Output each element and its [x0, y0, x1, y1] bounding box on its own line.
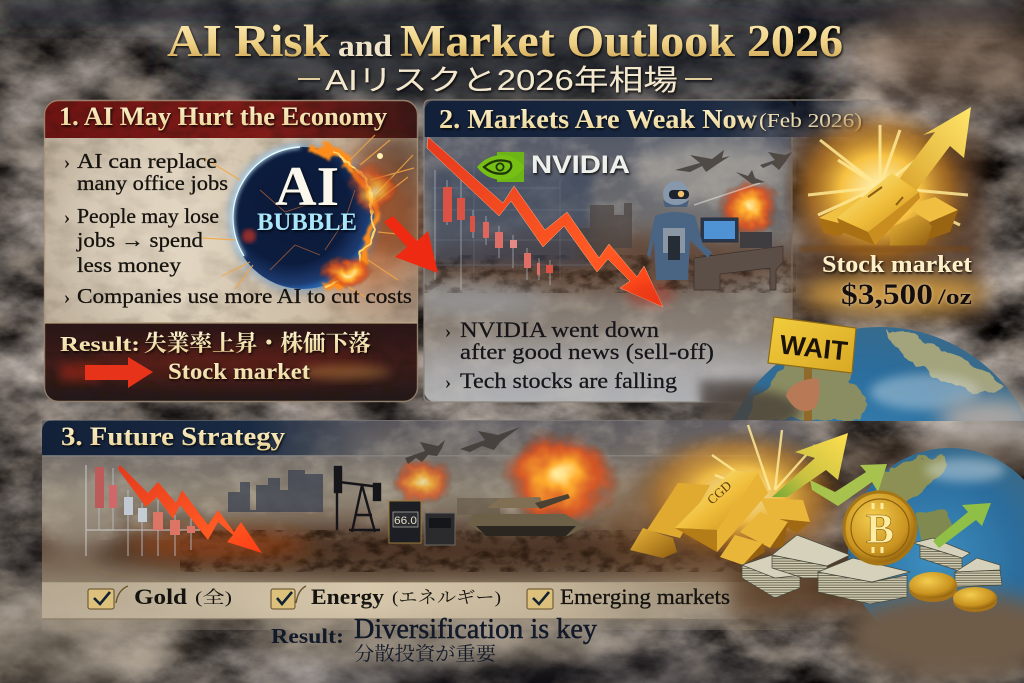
fighter jets	[675, 150, 792, 184]
red glow at arrow tip	[626, 283, 674, 307]
panel 1 result strip	[44, 322, 418, 403]
strategy check row band	[42, 582, 762, 620]
explosion	[717, 181, 781, 235]
panel 1 result text	[60, 331, 371, 384]
gold panel	[782, 102, 987, 317]
strategy result: Result:	[271, 624, 344, 648]
fuel gauges: 66.0	[394, 515, 417, 527]
panel 2 bullet list: ›	[445, 321, 451, 341]
city ruin silhouette	[575, 203, 632, 260]
panel 2 bullet list: ›	[445, 372, 451, 392]
gold label: Stock market	[822, 252, 972, 278]
panel 2 header band	[424, 100, 796, 137]
panel 1 bullet list: AI can replace	[77, 149, 217, 173]
panel 1 body	[44, 137, 420, 323]
main title: and	[338, 28, 392, 63]
gold price: $3,500	[841, 278, 933, 311]
hand	[786, 378, 819, 411]
check item: gold: Gold	[134, 584, 187, 609]
panel 2 heading: (Feb 2026)	[759, 110, 862, 132]
tank	[457, 494, 585, 536]
panel 1 bullet list: many office jobs	[77, 171, 228, 195]
globe upper	[700, 327, 1024, 421]
arrow: big red from bubble to panel 2	[384, 216, 438, 273]
globe lower	[845, 448, 1024, 680]
arrow: gold up	[897, 107, 971, 195]
panel 3: future strategy	[40, 420, 1024, 665]
robot body	[647, 212, 712, 280]
cash stacks	[742, 535, 1002, 604]
fuel gauges	[389, 501, 455, 545]
robot at desk	[647, 181, 783, 290]
panel 1 heading: 1. AI May Hurt the Economy	[59, 102, 387, 131]
logo: NVIDIA	[477, 151, 630, 182]
subtitle: AIリスクと2026年相場	[325, 64, 678, 97]
desk	[694, 246, 783, 290]
BUBBLE text: BUBBLE	[257, 209, 357, 236]
check item: energy: (エネルギー)	[392, 588, 501, 607]
panel 2 outline	[424, 100, 870, 402]
monitor	[701, 218, 738, 242]
panel 3 heading: 3. Future Strategy	[61, 422, 285, 451]
gold price	[841, 278, 972, 311]
bitcoin coin	[844, 492, 916, 564]
gold bars	[800, 173, 970, 252]
panel 1 bullet list	[64, 149, 412, 308]
panel 1 bullet list: Companies use more AI to cut costs	[77, 284, 412, 308]
arrow: green right	[933, 503, 991, 548]
candlestick chart small	[86, 465, 200, 556]
arrow: result red	[60, 357, 153, 388]
header extension	[796, 100, 886, 137]
check item: gold	[88, 584, 232, 609]
logo: NVIDIA: NVIDIA	[531, 151, 630, 179]
strategy result: 分散投資が重要	[354, 643, 496, 665]
panel 1 result text: Result:	[60, 332, 140, 356]
panel 1 result text: 失業率上昇・株価下落	[144, 331, 371, 356]
sign: WAIT: WAIT	[778, 330, 850, 367]
main title: Market Outlook 2026	[400, 16, 843, 66]
city skyline	[228, 470, 323, 512]
panel 1 bullet list: ›	[64, 287, 70, 307]
panel 1 result text: Stock market	[168, 359, 310, 384]
gold price: /oz	[937, 284, 972, 309]
sign: WAIT	[768, 317, 856, 421]
panel 2 heading: 2. Markets Are Weak Now	[439, 104, 758, 134]
check item: energy	[271, 584, 501, 609]
gold coins	[909, 572, 997, 612]
fighter jets small	[405, 427, 520, 464]
check item: energy: Energy	[311, 584, 384, 609]
main title	[167, 16, 843, 66]
panel 2 bullet list: NVIDIA went down	[460, 317, 659, 342]
panel 2 bullet list: after good news (sell-off)	[460, 339, 714, 364]
strategy result: Diversification is key	[354, 613, 597, 645]
panel 2 bullet list: Tech stocks are falling	[460, 368, 677, 393]
panel 2 bullet list	[445, 317, 714, 393]
bitcoin coin: B	[866, 507, 894, 553]
arrow: falling red small	[118, 465, 262, 553]
panel 1 bullet list: ›	[64, 152, 70, 172]
panel 3 header band	[42, 420, 762, 456]
arrow: falling red zigzag	[427, 137, 663, 307]
panel 1: AI may hurt the economy	[44, 100, 420, 403]
strategy result	[240, 613, 620, 665]
panel 1 header band	[44, 100, 418, 138]
candlestick chart	[432, 160, 600, 290]
gold pile and arrows	[630, 425, 1002, 612]
panel 1 bullet list: People may lose	[77, 204, 219, 228]
panel 1 bullet list: jobs → spend	[76, 228, 204, 252]
check item: gold: (全)	[195, 588, 232, 607]
title block	[167, 16, 843, 97]
arrow: gold-green up	[772, 433, 848, 497]
explosions	[391, 430, 620, 526]
burst	[630, 425, 850, 563]
bars: CGD	[704, 478, 734, 507]
main title: AI Risk	[167, 16, 330, 66]
icon: AI bubble	[202, 135, 420, 297]
check item: emerging markets: Emerging markets	[560, 584, 730, 609]
warm glow backdrop	[782, 102, 987, 317]
oil pump	[335, 467, 380, 532]
panel 2 illustration	[400, 137, 800, 407]
panel 1 bullet list: less money	[77, 253, 182, 277]
panel 3 background scene	[40, 420, 1024, 630]
arrow: green mid	[810, 464, 887, 506]
bars	[630, 470, 810, 565]
panel 1 bullet list: ›	[64, 207, 70, 227]
panel 2: markets are weak now	[400, 100, 886, 407]
AI text: AI	[275, 156, 339, 218]
